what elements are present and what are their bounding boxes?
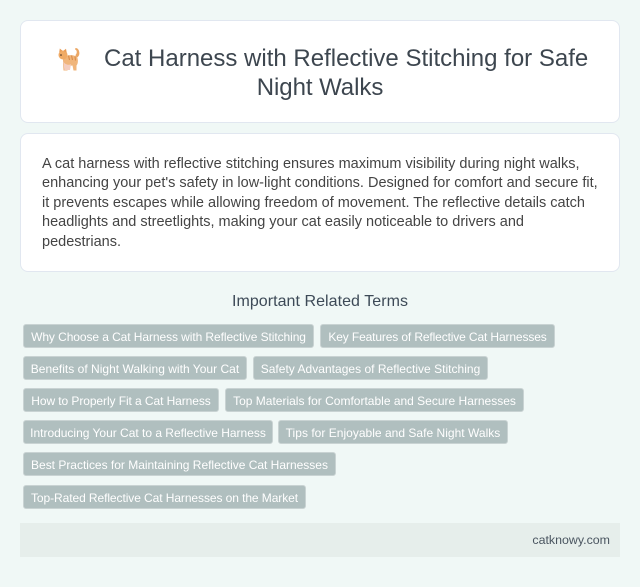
tag: Benefits of Night Walking with Your Cat [31,362,239,376]
text block: description: headlights and streetlights, making your cat easily noticeable to drivers and [42,214,524,230]
text block: description: A cat harness with reflective stitching ensures maximum visibility during night walks, [42,156,580,172]
text block: description [42,156,598,250]
panel: title card [20,20,620,123]
tag [320,324,555,348]
tag: Best Practices for Maintaining Reflective Cat Harnesses [31,458,328,472]
tag list [23,324,555,509]
footer text: site name: catknowy.com [532,533,610,547]
tag [253,356,488,380]
text block: description: pedestrians. [42,234,121,250]
tag [23,388,219,412]
text block: description: enhancing your pet's safety in low-light conditions. Designed for comfort and secure fit, [42,175,598,191]
tag [225,388,524,412]
tag: Top-Rated Reflective Cat Harnesses on the Market [31,491,298,505]
tag [23,324,314,348]
heading: title [104,45,588,101]
tag [23,356,247,380]
tag: Introducing Your Cat to a Reflective Harness [30,426,266,440]
tag [23,452,336,476]
tag [23,485,306,509]
tag [23,420,273,444]
tag: Top Materials for Comfortable and Secure Harnesses [233,394,516,408]
text block: description: it prevents escapes while allowing freedom of movement. The reflective details catch [42,195,585,211]
heading: title: Night Walks [257,74,383,101]
tag: Why Choose a Cat Harness with Reflective Stitching [31,330,306,344]
tag: Key Features of Reflective Cat Harnesses [328,330,547,344]
icon: cat [58,48,80,70]
heading: title: Cat Harness with Reflective Stitching for Safe [104,45,588,72]
heading: related terms: Important Related Terms [232,293,408,310]
tag: Safety Advantages of Reflective Stitching [261,362,480,376]
panel: description card [20,133,620,272]
tag: Tips for Enjoyable and Safe Night Walks [286,426,500,440]
tag: How to Properly Fit a Cat Harness [31,394,211,408]
tag [278,420,508,444]
footer bar [20,523,620,557]
